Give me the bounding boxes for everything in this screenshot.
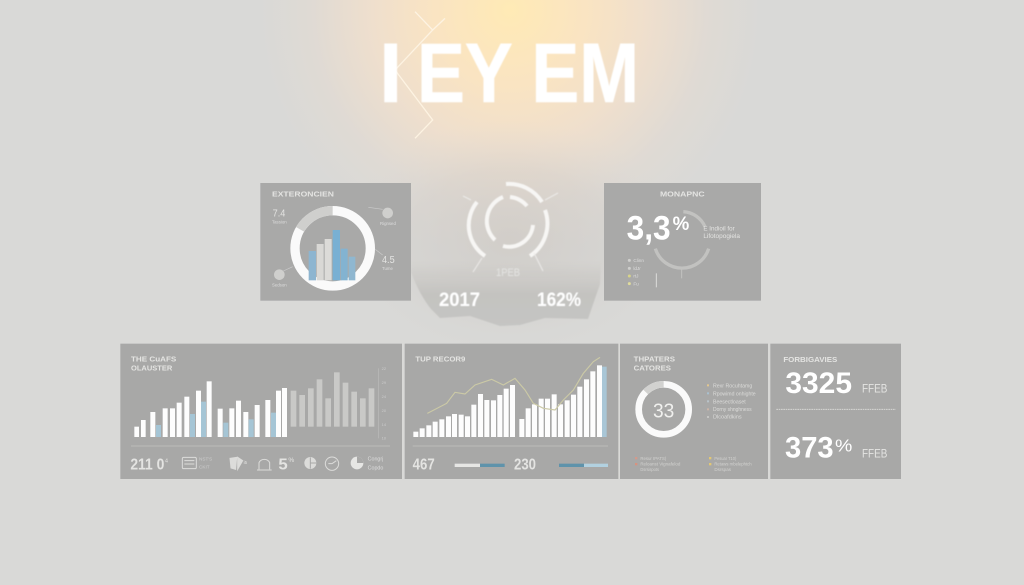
legend: Dlcoafdkins: [713, 415, 742, 421]
stat: 4.5: 4.5: [382, 255, 395, 266]
big percentage: %: [673, 214, 689, 235]
stat row: CKIT: [199, 465, 210, 470]
panel heading: FORBIGAVIES: [783, 357, 838, 364]
stat: 467: 467: [413, 456, 435, 473]
chart axis: 10: [382, 436, 387, 441]
panel: top right percentage: [604, 183, 761, 301]
stat: 162%: 162%: [537, 290, 581, 311]
panel heading: [634, 357, 675, 373]
stat row: 211 0: [130, 456, 164, 473]
stat: 3325: 3325: [785, 367, 852, 400]
legend: Rexr Rocuhtamg: [713, 384, 752, 390]
panel heading: EXTERONCIEN: [272, 190, 335, 199]
panel heading: CATORES: [634, 366, 671, 373]
gauge arcs: [655, 212, 709, 287]
gauge label: 1PEB: [496, 267, 520, 279]
legend: rtJ: [633, 274, 639, 279]
panel heading: THPATERS: [634, 357, 675, 364]
centre ring gauge: [463, 184, 558, 272]
title: EY EM: [417, 26, 639, 120]
stat row: 4: [165, 459, 168, 465]
stat row: i5: [244, 460, 248, 465]
legend: Dorny shnghness: [713, 407, 752, 413]
axis rule: [413, 444, 608, 447]
legend: Beesectloaset: [713, 399, 746, 405]
panel: top records: [405, 344, 618, 479]
note text: [703, 227, 741, 240]
trend line: [427, 357, 600, 413]
grey bars: [291, 372, 374, 427]
legend: ldJr: [633, 266, 641, 271]
footnote right: Retaws mbelephtch: [714, 462, 752, 467]
stat: 373%: [785, 432, 887, 465]
note text: E Indioil for: [703, 227, 735, 233]
footnote left: [635, 456, 681, 472]
legend: Rpowimd onhighte: [713, 391, 756, 397]
chart axis: 24: [382, 394, 387, 399]
stat: 230: 230: [514, 456, 536, 473]
stat: 373%: %: [835, 436, 852, 456]
icon: badge top right: Rignsed: [380, 221, 396, 226]
icon: badge bottom left: [272, 267, 293, 288]
top glow: [0, 0, 1024, 300]
stat: 4.5: [382, 255, 395, 271]
stat: 3325: [785, 367, 887, 400]
centre haze: [340, 120, 680, 360]
stat: 7.4: [272, 208, 287, 224]
big percentage: 3,3: [627, 209, 671, 247]
legend: [628, 258, 644, 286]
panel: bar chart cluster: [120, 344, 402, 479]
donut: 33: [653, 400, 674, 422]
footnote right: [709, 456, 752, 472]
stat: 7.4: Tassion: [272, 219, 287, 224]
icon: badge bottom left: Sedson: [272, 283, 287, 288]
legend: [707, 384, 756, 421]
panel heading: OLAUSTER: [131, 365, 172, 372]
blue background bars: [156, 402, 276, 437]
note text: Lifotopogiela: [703, 234, 741, 240]
chart axis: 29: [382, 380, 387, 385]
panel: top left donut: [260, 183, 411, 301]
chart axis: 14: [382, 422, 387, 427]
title: I: [379, 26, 402, 120]
stat row: %: [288, 457, 294, 464]
white bars: [134, 381, 287, 437]
icon: badge top right: [368, 207, 396, 226]
legend: Fu: [633, 281, 639, 286]
panel heading: MONAPNC: [660, 190, 705, 199]
stat: 7.4: 7.4: [273, 208, 286, 219]
footnote left: Resur IPATS): [640, 456, 667, 461]
panel: centre shield: [411, 184, 601, 326]
stat: 230: [514, 456, 608, 473]
panel: forecasts stats: [770, 344, 901, 479]
stat row: NST'S: [199, 457, 212, 462]
stat: 373%: 373: [785, 432, 834, 465]
stat: 4.5: Tume: [382, 266, 393, 271]
footnote right: Pesuar T10): [714, 456, 737, 461]
stat row: 5: [278, 456, 288, 473]
stat: 373%: FFEB: [862, 447, 887, 461]
chart axis: 20: [382, 408, 387, 413]
donut ring: [295, 211, 370, 286]
stat row: Congrj: [368, 457, 383, 463]
chart axis: [131, 366, 390, 446]
white bars: [413, 365, 602, 437]
panel heading: TUP RECOR9: [415, 357, 465, 364]
icons row: [182, 457, 363, 470]
blue bar strip: [602, 367, 607, 437]
stat row: [130, 456, 383, 473]
donut bar chart: [309, 230, 355, 280]
stat: 3325: FFEB: [862, 381, 887, 395]
donut: [639, 384, 689, 434]
footnote right: Dsrspas: [714, 467, 732, 472]
panel heading: [131, 357, 177, 372]
stat row: Copdo: [368, 465, 383, 471]
footnote left: Dsrsispots: [640, 467, 660, 472]
stat: 2017: 2017: [439, 290, 480, 311]
stat: 467: [413, 456, 505, 473]
panel heading: THE CuAFS: [131, 357, 177, 364]
icon: angular K strokes: [395, 12, 445, 138]
legend: Clinn: [633, 258, 644, 263]
chart axis: 22: [382, 366, 387, 371]
panel: categories donut: [620, 344, 768, 479]
footnote left: Reloanst Vignafelod: [640, 462, 681, 467]
